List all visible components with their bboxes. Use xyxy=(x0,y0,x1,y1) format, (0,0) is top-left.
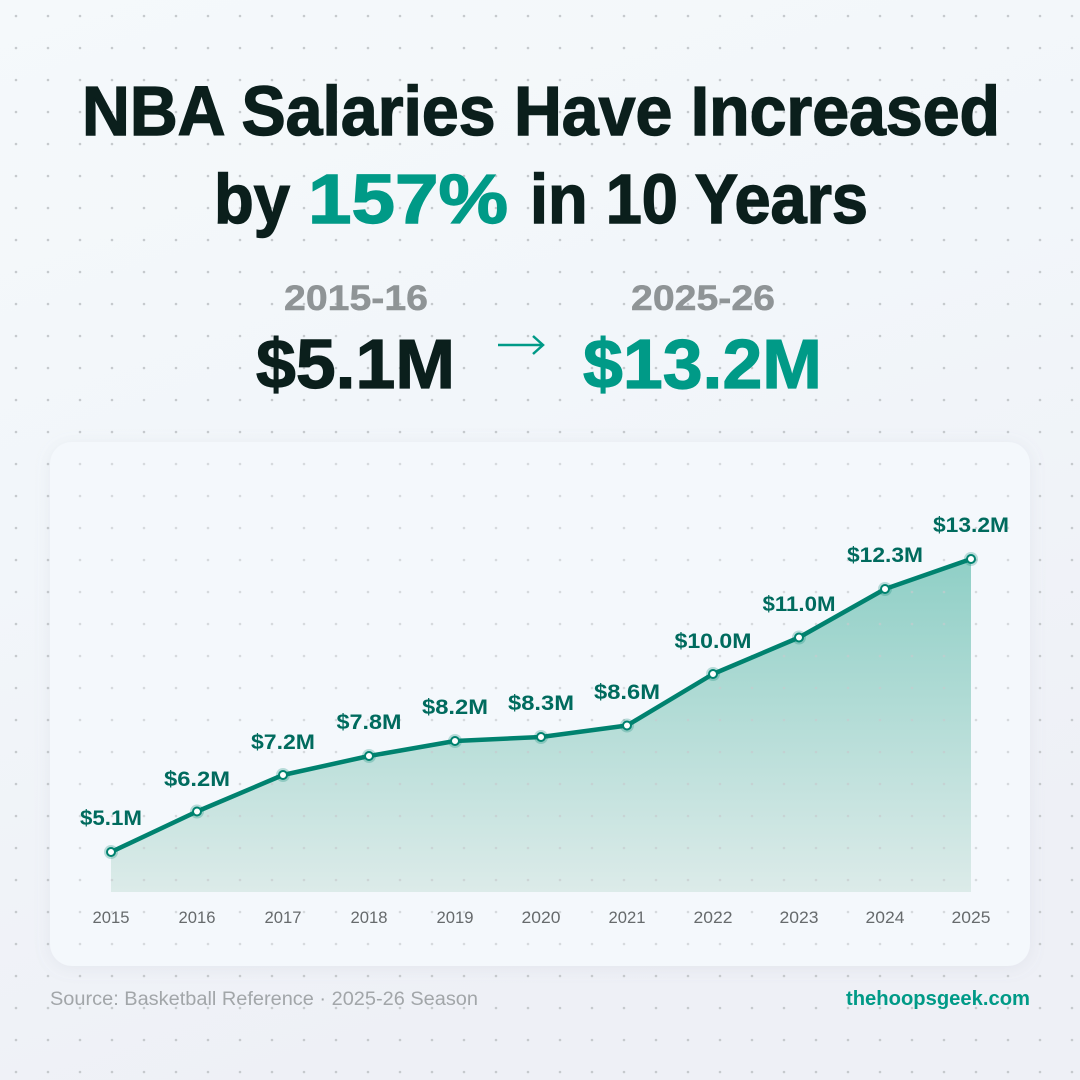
title: by xyxy=(214,160,290,238)
x-axis year labels: 2015 xyxy=(92,909,130,927)
data value labels: $7.8M xyxy=(336,711,402,734)
title: NBA Salaries Have Increased xyxy=(82,72,1000,150)
data point markers xyxy=(104,552,978,859)
salary line xyxy=(111,559,971,852)
title: 157% xyxy=(308,160,508,238)
panel: line chart card xyxy=(78,462,1010,946)
data value labels: $8.6M xyxy=(594,681,660,704)
x-axis year labels: 2022 xyxy=(694,909,732,927)
data value labels xyxy=(80,514,1009,830)
data value labels: $8.3M xyxy=(508,692,574,715)
stat: 2015-16 salary xyxy=(256,279,455,403)
x-axis year labels: 2020 xyxy=(522,909,560,927)
title xyxy=(82,72,1000,238)
data value labels: $6.2M xyxy=(164,768,230,791)
x-axis year labels: 2025 xyxy=(952,909,990,927)
data value labels: $10.0M xyxy=(674,630,752,653)
stat: 2025-26 salary: 2025-26 xyxy=(631,279,775,318)
data value labels: $8.2M xyxy=(422,696,488,719)
stat: 2025-26 salary xyxy=(583,279,822,403)
data value labels: $12.3M xyxy=(847,544,923,567)
stat: 2025-26 salary: $13.2M xyxy=(583,325,822,403)
stat: 2015-16 salary: $5.1M xyxy=(256,325,455,403)
title: in 10 Years xyxy=(530,160,868,238)
data value labels: $13.2M xyxy=(933,514,1009,537)
data value labels: $7.2M xyxy=(251,731,315,754)
x-axis year labels: 2021 xyxy=(608,909,646,927)
data value labels: $5.1M xyxy=(80,807,142,830)
x-axis year labels: 2024 xyxy=(866,909,904,927)
x-axis year labels: 2019 xyxy=(436,909,474,927)
area under line xyxy=(111,559,971,892)
x-axis year labels: 2018 xyxy=(350,909,388,927)
arrow xyxy=(498,336,543,354)
source note: Source: Basketball Reference · 2025-26 Season xyxy=(50,989,478,1010)
data value labels: $11.0M xyxy=(762,593,836,616)
stat: 2015-16 salary: 2015-16 xyxy=(284,279,428,318)
x-axis year labels: 2017 xyxy=(264,909,302,927)
x-axis year labels: 2023 xyxy=(780,909,818,927)
x-axis year labels xyxy=(92,909,990,927)
x-axis year labels: 2016 xyxy=(178,909,216,927)
website credit: thehoopsgeek.com xyxy=(846,988,1030,1010)
